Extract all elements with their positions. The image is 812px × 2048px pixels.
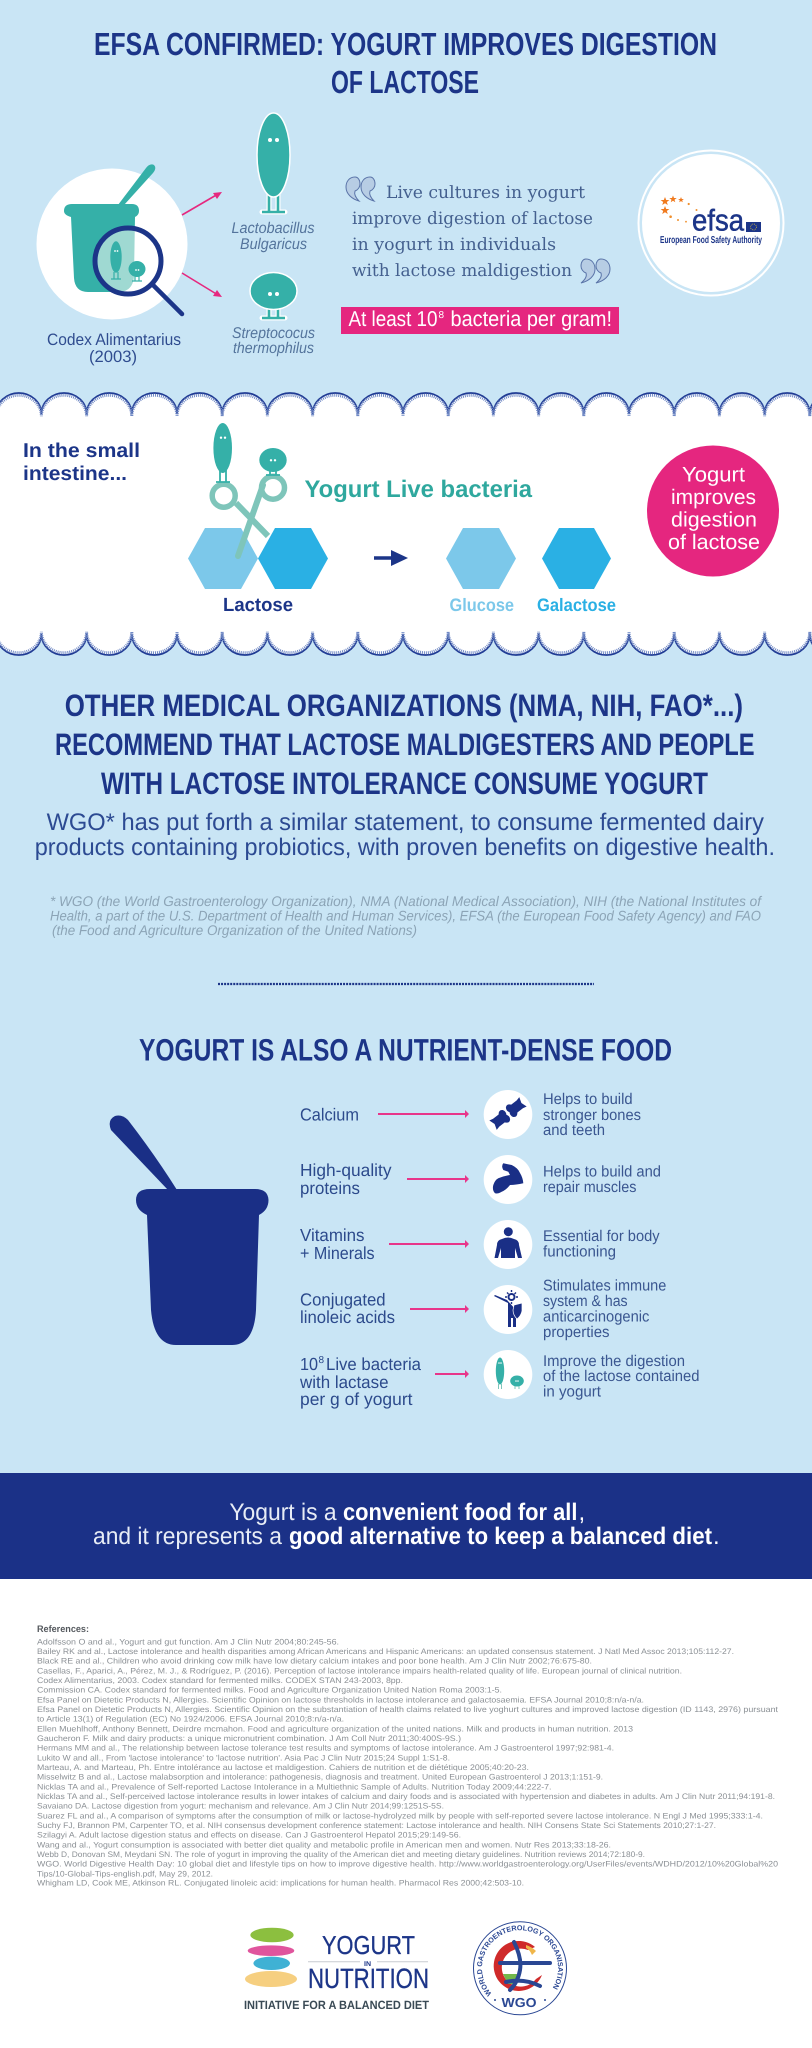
benefit texts: Helps to build (543, 1091, 633, 1108)
diagram: galactose hexagon (542, 528, 611, 589)
benefit texts: Helps to build and (543, 1164, 661, 1181)
banner: convenient food: . (713, 1523, 720, 1550)
references list: Szilagyi A. Adult lactose digestion status and effects on disease. Can J Gastroenterol Hepatol 2015;29:149-56. (37, 1831, 461, 1840)
heading: in the small intestine (23, 440, 140, 485)
references heading: References: (37, 1624, 89, 1635)
icon: closing quotation mark (581, 259, 610, 283)
references list: Nicklas TA and al., Prevalence of Self-reported Lactose Intolerance in a Multiethnic Sample of Adults. Nutrition Today 2009;44:222-7. (37, 1782, 552, 1791)
benefit texts: functioning (543, 1244, 616, 1261)
references list: Tips/10-Global-Tips-english.pdf, May 29, 2012. (37, 1869, 213, 1878)
benefit texts: properties (543, 1324, 610, 1341)
logo: EFSA: efsa (692, 205, 744, 238)
icon: flexed arm (484, 1155, 532, 1204)
footnote (50, 893, 763, 938)
diagram: hexagons of lactose (188, 528, 328, 589)
caption: Codex Alimentarius: Codex Alimentarius (47, 331, 181, 349)
nutrient labels: Calcium (300, 1105, 359, 1125)
logo: Yogurt in Nutrition: IN (364, 1961, 371, 1968)
icon: Streptococcus bacterium (250, 272, 297, 318)
references list: Efsa Panel on Dietetic Products N, Allergies. Scientific Opinion on the substantiation of health claims related to live yoghurt cultures and improved lactose digestion (ID 1143, 2976) pursuant (37, 1705, 779, 1714)
benefit texts (543, 1091, 700, 1401)
benefit texts: stronger bones (543, 1107, 641, 1124)
quote text: Live cultures in yogurt (386, 183, 585, 203)
references list: Bailey RK and al., Lactose intolerance and health disparities among African Americans and Hispanic Americans: an updated consensus statement. J Natl Med Assoc 2013;105:112-27. (37, 1647, 734, 1656)
banner: convenient food: Yogurt is a (229, 1499, 337, 1526)
callout: yogurt improves digestion of lactose: of lactose (668, 531, 760, 554)
references list: to Article 13(1) of Regulation (EC) No 1924/2006. EFSA Journal 2010;8:n/a-n/a. (37, 1715, 344, 1724)
icon: bone joint (484, 1090, 532, 1139)
callout: at least 10^8 bacteria per gram (341, 307, 619, 334)
benefit texts: Improve the digestion (543, 1353, 685, 1370)
references list: Suarez FL and al., A comparison of symptoms after the consumption of milk or lactose-hydrolyzed milk by people with self-reported severe lactose intolerance. N Engl J Med 1995;333:1-4. (37, 1811, 763, 1820)
title (94, 26, 717, 100)
title: OF LACTOSE (331, 64, 479, 100)
footnote: Health, a part of the U.S. Department of Health and Human Services), EFSA (the European Food Safety Agency) and FAO (50, 908, 761, 924)
references list: Suchy FJ, Brannon PM, Carpenter TO, et al. NIH consensus development conference statement: Lactose intolerance and health. NIH Consens State Sci Statements 2010;27:1-27. (37, 1821, 716, 1830)
arrow: lactose to products (374, 550, 408, 566)
references list: Lukito W and all., From 'lactose intolerance' to 'lactose nutrition'. Asia Pac J Clin Nutr 2015;24 Suppl 1:S1-8. (37, 1753, 450, 1762)
references list: Whigham LD, Cook ME, Atkinson RL. Conjugated linoleic acid: implications for human health. Pharmacol Res 2000;42:503-10. (37, 1878, 524, 1888)
logo: Yogurt in Nutrition (244, 1928, 430, 2012)
benefit texts: Stimulates immune (543, 1278, 666, 1295)
banner: convenient food: convenient food for all (343, 1499, 577, 1526)
heading: other medical organizations (55, 688, 754, 801)
text block: WGO statement (35, 809, 775, 861)
label: Streptococus thermophilus: Streptococus (232, 325, 315, 342)
callout: yogurt improves digestion of lactose: Yogurt (682, 464, 745, 487)
label: Glucose: Glucose (450, 595, 514, 615)
references list: Codex Alimentarius, 2003. Codex standard for fermented milks. CODEX STAN 243-2003, 8pp. (37, 1676, 403, 1685)
references list: Marteau, A. and Marteau, Ph. Entre intolérance au lactose et maldigestion. Cahiers de nutrition et de diététique 2005;40:20-23. (37, 1763, 529, 1772)
benefit texts: Essential for body (543, 1228, 660, 1245)
icon: immune figure with shield (484, 1285, 532, 1334)
icon: bacteria pair (484, 1350, 532, 1399)
references list: Casellas, F., Aparici, A., Pérez, M. J., & Rodríguez, P. (2016). Perception of lactose intolerance impairs health-related quality of life. European journal of clinical nutrition. (37, 1666, 682, 1675)
footnote: * WGO (the World Gastroenterology Organization), NMA (National Medical Association), NIH (the National Institutes of (50, 893, 763, 909)
benefit texts: repair muscles (543, 1179, 637, 1196)
benefit texts: of the lactose contained (543, 1368, 700, 1385)
icon: Lactobacillus bacterium (257, 113, 290, 212)
nutrient labels: 10 (300, 1354, 318, 1374)
references list: Ellen Muehlhoff, Anthony Bennett, Deirdre mcmahon. Food and agriculture organization of the united nations. Milk and products in human nutrition. 2013 (37, 1724, 634, 1733)
quote text: with lactose maldigestion (352, 261, 572, 281)
label: Yogurt Live bacteria: Yogurt Live bacteria (304, 476, 533, 503)
label: Galactose: Galactose (537, 595, 616, 615)
references list: Adolfsson O and al., Yogurt and gut function. Am J Clin Nutr 2004;80:245-56. (37, 1637, 339, 1646)
label: Lactose: Lactose (223, 595, 293, 616)
references list: Nicklas TA and al., Self-perceived lactose intolerance results in lower intakes of calcium and dairy foods and is associated with hypertension and diabetes in adults. Am J Clin Nutr 2011;94:191-8. (37, 1792, 775, 1801)
callout: at least 10^8 bacteria per gram: 8 (438, 310, 444, 321)
nutrient labels: per g of yogurt (300, 1389, 413, 1409)
callout: at least 10^8 bacteria per gram: bacteria per gram! (450, 307, 612, 331)
logo: Yogurt in Nutrition: NUTRITION (308, 1963, 429, 1994)
benefit texts: in yogurt (543, 1384, 602, 1401)
arrow: to lactobacillus (182, 192, 222, 215)
nutrient labels: 8 (318, 1355, 324, 1366)
references list: Commission CA. Codex standard for fermented milks. Food and Agriculture Organization United Nation Roma 2003:1-5. (37, 1686, 502, 1695)
footnote: (the Food and Agriculture Organization of the United Nations) (52, 922, 417, 938)
banner: convenient food (0, 1473, 812, 1579)
banner: convenient food: good alternative to keep a balanced diet (289, 1523, 712, 1550)
nutrient labels: Vitamins (300, 1225, 365, 1245)
callout: at least 10^8 bacteria per gram: At least 10 (348, 307, 438, 331)
diagram: glucose hexagon (446, 528, 516, 589)
text block: WGO statement: WGO* has put forth a similar statement, to consume fermented dairy (47, 809, 764, 836)
references list: Gaucheron F. Milk and dairy products: a unique micronutrient combination. J Am Coll Nutr 2011;30:400S-9S.) (37, 1734, 461, 1743)
logo: Yogurt in Nutrition: YOGURT (322, 1930, 415, 1960)
nutrient labels: proteins (300, 1178, 360, 1198)
logo: WGO: WORLD GASTROENTEROLOGY ORGANISATION (477, 1925, 563, 1997)
arrow: to streptococcus (182, 273, 222, 297)
quote text: improve digestion of lactose (352, 209, 593, 229)
references list (37, 1637, 779, 1888)
panel: small intestine (0, 393, 812, 655)
icon: human body (484, 1220, 532, 1269)
quote text (352, 183, 593, 281)
references list: Wang and al., Yogurt consumption is associated with better diet quality and metabolic profile in American men and women. Nutr Res 2013;33:18-26. (37, 1840, 611, 1849)
label: Streptococus thermophilus: thermophilus (233, 340, 314, 357)
nutrient labels: High-quality (300, 1160, 392, 1180)
icon: opening quotation mark (346, 177, 375, 201)
logo: WGO: WGO (502, 1995, 536, 2010)
banner: convenient food: , (578, 1499, 585, 1526)
icon: yogurt cup under magnifying glass (36, 164, 188, 320)
nutrient labels: Live bacteria (326, 1354, 421, 1374)
references list: Misselwitz B and al., Lactose malabsorption and intolerance: pathogenesis, diagnosis and treatment. United European Gastroenterol J 2013;1:151-9. (37, 1773, 603, 1782)
heading: in the small intestine: intestine... (23, 463, 127, 485)
caption: Codex Alimentarius: (2003) (89, 348, 137, 366)
benefit texts: and teeth (543, 1122, 605, 1139)
nutrient labels: with lactase (299, 1372, 388, 1392)
logo: EFSA (638, 150, 784, 296)
label: Lactobacillus Bulgaricus: Lactobacillus (232, 220, 315, 237)
benefit texts: system & has (543, 1293, 628, 1310)
quote text: in yogurt in individuals (352, 235, 556, 255)
references list: WGO. World Digestive Health Day: 10 global diet and lifestyle tips on how to improve digestive health. http://www.worldgastroenterology.org/UserFiles/events/WDHD/2012/10%20Global%20 (37, 1860, 779, 1869)
arrows: nutrient to benefit (378, 1110, 469, 1378)
label: Lactobacillus Bulgaricus (232, 220, 315, 253)
label: Streptococus thermophilus (232, 325, 315, 357)
callout: yogurt improves digestion of lactose: improves (671, 486, 756, 509)
nutrient labels: linoleic acids (300, 1307, 395, 1327)
nutrient labels (299, 1105, 421, 1409)
label: Lactobacillus Bulgaricus: Bulgaricus (240, 236, 307, 253)
callout: yogurt improves digestion of lactose: digestion (671, 509, 757, 532)
heading: in the small intestine: In the small (23, 440, 140, 462)
benefit texts: anticarcinogenic (543, 1309, 650, 1326)
banner: convenient food: and it represents a (93, 1523, 283, 1550)
logo: EFSA: European Food Safety Authority (660, 235, 762, 246)
references list: Efsa Panel on Dietetic Products N, Allergies. Scientific Opinion on lactose thresholds in lactose intolerance and galactosaemia. EFSA Journal 2010;8:n/a-n/a. (37, 1695, 644, 1704)
logo: Yogurt in Nutrition: INITIATIVE FOR A BALANCED DIET (244, 1998, 430, 2012)
icon: navy yogurt cup with spoon (110, 1116, 269, 1345)
references list: Webb D, Donovan SM, Meydani SN. The role of yogurt in improving the quality of the American diet and meeting dietary guidelines. Nutrition reviews 2014;72:180-9. (37, 1850, 645, 1859)
nutrient labels: + Minerals (300, 1243, 375, 1263)
nutrient labels: Conjugated (300, 1290, 386, 1310)
heading: nutrient-dense food: YOGURT IS ALSO A NUTRIENT-DENSE FOOD (139, 1032, 672, 1068)
text block: WGO statement: products containing probiotics, with proven benefits on digestive health. (35, 834, 775, 861)
references list: Hermans MM and al., The relationship between lactose tolerance test results and symptoms of lactose intolerance. Am J Gastroenterol 1997;92:981-4. (37, 1744, 614, 1753)
references list: Black RE and al., Children who avoid drinking cow milk have low dietary calcium intakes and poor bone health. Am J Clin Nutr 2002;76:675-80. (37, 1657, 592, 1666)
icon: scissors with bacteria (212, 423, 287, 556)
callout: yogurt improves digestion of lactose (647, 446, 779, 576)
caption: Codex Alimentarius (47, 331, 181, 366)
references list: Savaiano DA. Lactose digestion from yogurt: mechanism and relevance. Am J Clin Nutr 2014;99:1251S-5S. (37, 1802, 444, 1811)
